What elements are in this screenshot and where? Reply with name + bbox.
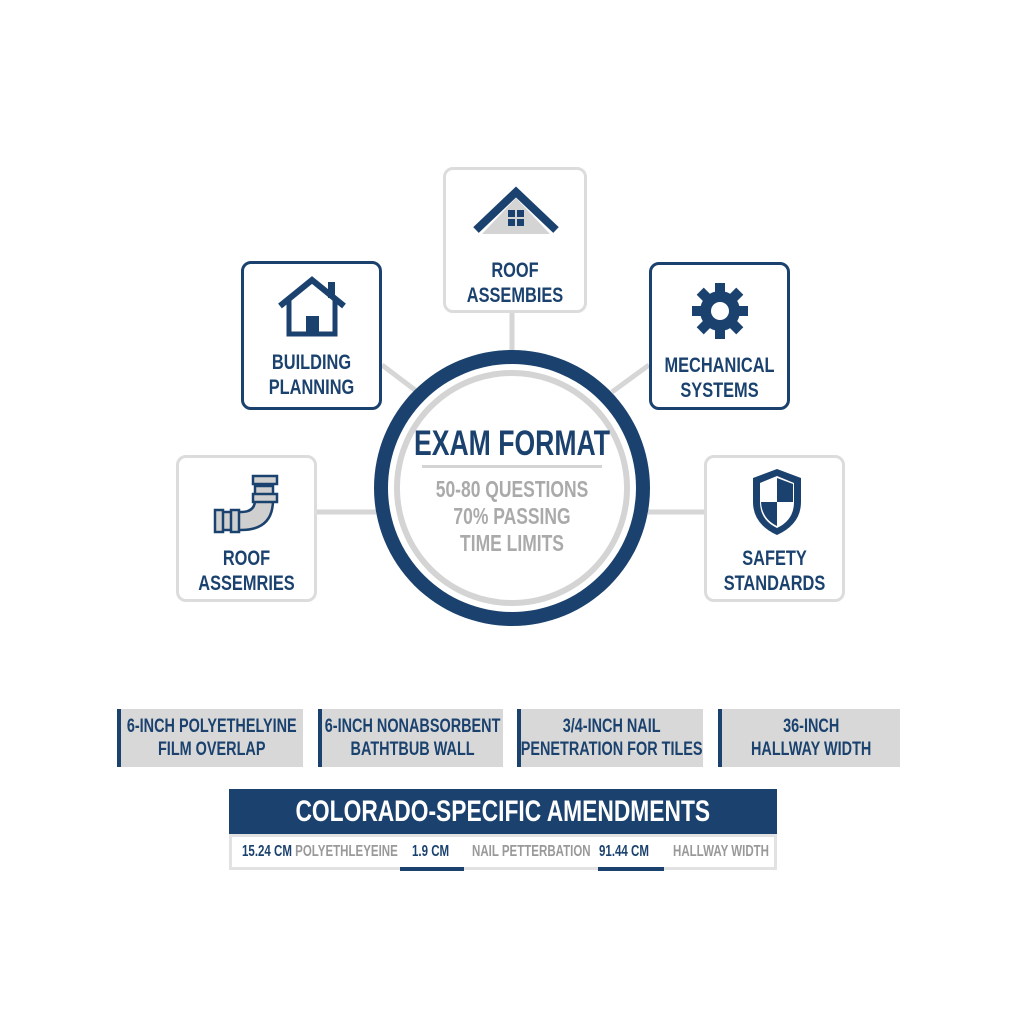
fact: polyethylene — [117, 709, 303, 767]
fact: polyethylene: 6-INCH POLYETHELYINE — [127, 716, 297, 737]
center circle: exam format — [374, 350, 650, 626]
fact: nail: PENETRATION FOR TILES — [521, 739, 703, 760]
icon: shield — [753, 469, 801, 535]
icon: roof — [473, 186, 559, 234]
panel: safety standards — [704, 455, 845, 602]
panel: mechanical systems — [649, 262, 790, 410]
fact: nail — [517, 709, 703, 767]
fact: hallway: HALLWAY WIDTH — [751, 739, 871, 760]
text: exam details: TIME LIMITS — [460, 530, 564, 556]
panel: roof assemries left: ROOF — [223, 547, 270, 570]
text: exam details: 70% PASSING — [453, 503, 571, 529]
metric strip — [229, 834, 777, 870]
fact: polyethylene: FILM OVERLAP — [158, 739, 266, 760]
panel: building planning: PLANNING — [269, 376, 354, 399]
panel: roof assemblies top: ROOF — [491, 259, 539, 282]
panel: roof assemries left: ASSEMRIES — [198, 572, 295, 595]
icon: pipe — [214, 474, 278, 534]
panel: mechanical systems: SYSTEMS — [680, 379, 759, 402]
text: exam details — [436, 476, 588, 556]
panel: safety standards: STANDARDS — [724, 572, 825, 595]
text: exam details: 50-80 QUESTIONS — [436, 476, 588, 502]
fact: hallway: 36-INCH — [783, 716, 839, 737]
banner: colorado amendments: COLORADO-SPECIFIC AMENDMENTS — [296, 795, 710, 828]
metric strip: HALLWAY WIDTH — [673, 843, 769, 860]
metric strip: 15.24 CM POLYETHLEYEINE — [242, 843, 398, 860]
metric strip: 1.9 CM — [412, 843, 449, 860]
panel: roof assemblies top — [443, 167, 587, 313]
fact: hallway — [718, 709, 900, 767]
fact: nonabsorbent: BATHTBUB WALL — [350, 739, 475, 760]
panel: mechanical systems: MECHANICAL — [664, 354, 775, 377]
panel: building planning: BUILDING — [272, 351, 351, 374]
fact: nonabsorbent: 6-INCH NONABSORBENT — [325, 716, 500, 737]
panel: roof assemblies top: ASSEMBIES — [467, 284, 563, 307]
metric strip: NAIL PETTERBATION — [472, 843, 591, 860]
panel: safety standards: SAFETY — [742, 547, 807, 570]
icon: house — [278, 276, 346, 336]
banner: colorado amendments — [229, 789, 777, 834]
panel: roof assemries left — [176, 455, 317, 602]
icon: gear — [692, 283, 748, 339]
heading: exam format: EXAM FORMAT — [414, 424, 610, 463]
metric strip: 91.44 CM — [599, 843, 649, 860]
panel: building planning — [241, 261, 382, 410]
fact: nail: 3/4-INCH NAIL — [563, 716, 661, 737]
fact: nonabsorbent — [318, 709, 503, 767]
